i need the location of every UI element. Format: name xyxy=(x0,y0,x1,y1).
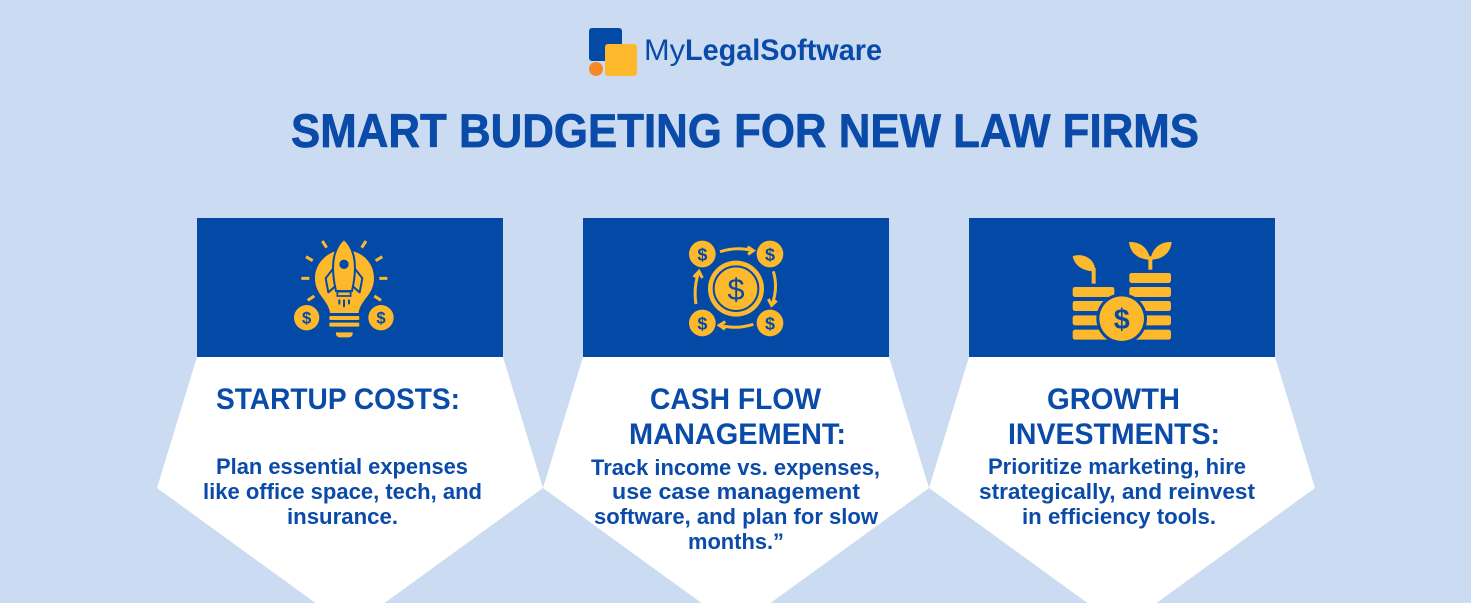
panel text: use case management xyxy=(612,479,861,504)
panel text: months.” xyxy=(688,529,784,554)
panel text: Plan essential expenses xyxy=(216,454,468,479)
panel heading xyxy=(629,383,846,451)
icon: rocket light bulb: $ xyxy=(302,309,312,328)
icon: circulating dollar coins: $ xyxy=(765,244,775,264)
panel body xyxy=(157,357,543,603)
panel text: strategically, and reinvest xyxy=(979,479,1256,504)
panel body xyxy=(929,357,1315,603)
panel heading: INVESTMENTS: xyxy=(1008,418,1220,451)
panel heading: MANAGEMENT: xyxy=(629,418,846,451)
panel text: insurance. xyxy=(287,504,398,529)
panel text: Track income vs. expenses, xyxy=(591,455,880,480)
panel text xyxy=(203,454,482,529)
icon: coin stacks with sprouts: $ xyxy=(1114,304,1130,336)
logo wordmark: LegalSoftware xyxy=(685,34,882,67)
panel heading: GROWTH xyxy=(1047,383,1180,416)
title: SMART BUDGETING FOR NEW LAW FIRMS xyxy=(291,104,1199,157)
panel body xyxy=(543,357,929,603)
icon: rocket light bulb: $ xyxy=(376,309,386,328)
panel header xyxy=(969,218,1275,357)
panel text: software, and plan for slow xyxy=(594,504,878,529)
logo wordmark: My xyxy=(644,34,685,67)
panel header xyxy=(583,218,889,357)
icon: circulating dollar coins xyxy=(689,241,783,336)
logo mark xyxy=(589,28,637,76)
panel: growth investments xyxy=(929,218,1315,603)
panel heading: CASH FLOW xyxy=(650,383,821,416)
icon: circulating dollar coins: $ xyxy=(727,273,745,307)
panel text: Prioritize marketing, hire xyxy=(988,454,1246,479)
icon: circulating dollar coins: $ xyxy=(697,244,707,264)
panel heading: STARTUP COSTS: xyxy=(216,383,460,416)
panel: startup costs xyxy=(157,218,543,603)
panel text xyxy=(591,455,880,554)
icon: circulating dollar coins: $ xyxy=(765,313,775,333)
panel header xyxy=(197,218,503,357)
logo xyxy=(589,28,882,76)
icon: rocket light bulb xyxy=(294,239,394,337)
panel: cash flow management xyxy=(543,218,929,603)
icon: circulating dollar coins: $ xyxy=(697,313,707,333)
panel heading xyxy=(1008,383,1220,451)
panel text: in efficiency tools. xyxy=(1022,504,1216,529)
panel text: like office space, tech, and xyxy=(203,479,482,504)
icon: coin stacks with sprouts xyxy=(1073,242,1172,344)
panel text xyxy=(979,454,1256,529)
